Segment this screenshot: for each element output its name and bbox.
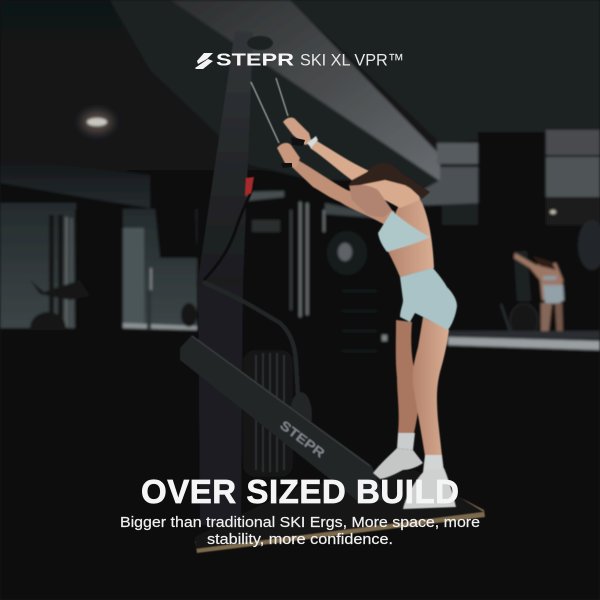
near sock [423,455,444,472]
sports bra [378,211,430,252]
rack uprights [252,202,325,317]
right soffit [430,203,482,233]
far arm [292,160,395,225]
mirror wall middle [546,157,600,197]
right lit wall lower [395,167,478,205]
athlete [277,118,457,509]
red light [245,177,254,196]
upper right ceiling [290,0,600,143]
lower wall shadow [448,350,600,380]
mirror soffit [546,198,600,225]
left wall [0,203,76,328]
logo [195,50,404,70]
description [120,514,480,548]
mirror wall top [546,130,600,155]
floor [0,380,600,600]
description line 2: stability, more confidence. [207,531,393,548]
lower upright [198,284,243,525]
left soffit [0,158,150,208]
rail edge highlight [192,336,370,466]
hair [348,163,430,199]
floor board [195,470,485,553]
brand name: STEPR [216,50,294,70]
ceiling beam underside [110,0,440,200]
upright post [197,30,253,286]
upright top cap [247,36,273,50]
fan hub disc [290,392,312,438]
right ledge top [448,331,600,339]
far sock [397,433,415,450]
far hand [277,143,300,168]
near leg [413,317,449,456]
far shoe [373,448,423,479]
window sill [123,323,197,330]
shorts [400,268,457,330]
head face [349,184,392,217]
medicine ball [327,231,367,275]
description line 1: Bigger than traditional SKI Ergs, More space, more [120,514,480,531]
wristband [307,136,318,148]
rail brand text: STEPR [277,417,328,461]
far leg [396,320,419,433]
slanted rail [180,335,385,503]
dark column [75,210,124,332]
dark pillar [478,132,548,337]
fan wheel [243,350,293,477]
barbell rack silhouettes [30,215,197,375]
rack top light [245,191,284,201]
handle arc [203,282,298,397]
back wall right [430,225,600,337]
pull cables [251,78,288,143]
near arm [310,141,420,208]
black cable [204,186,253,280]
ceiling [0,0,600,170]
dark soffit edge [0,183,140,212]
product name: SKI XL VPR™ [300,50,404,70]
near shoe [403,468,456,509]
reflected woman [514,253,564,338]
right lit wall [437,143,478,164]
reflected machine [501,252,538,338]
wall mounted TV [152,176,197,258]
right ledge highlight [448,337,600,350]
near hand [283,118,312,145]
ceiling spotlight [81,111,113,133]
weight storage [342,290,387,352]
punching bag reflection [578,220,600,270]
headline: OVER SIZED BUILD [141,473,459,510]
ski erg machine [180,30,485,553]
rack background [197,180,392,380]
hand grips [281,137,305,168]
lit ceiling beam [170,0,440,181]
logo icon [195,53,213,69]
midriff and back [387,195,434,277]
window wall [123,209,198,326]
